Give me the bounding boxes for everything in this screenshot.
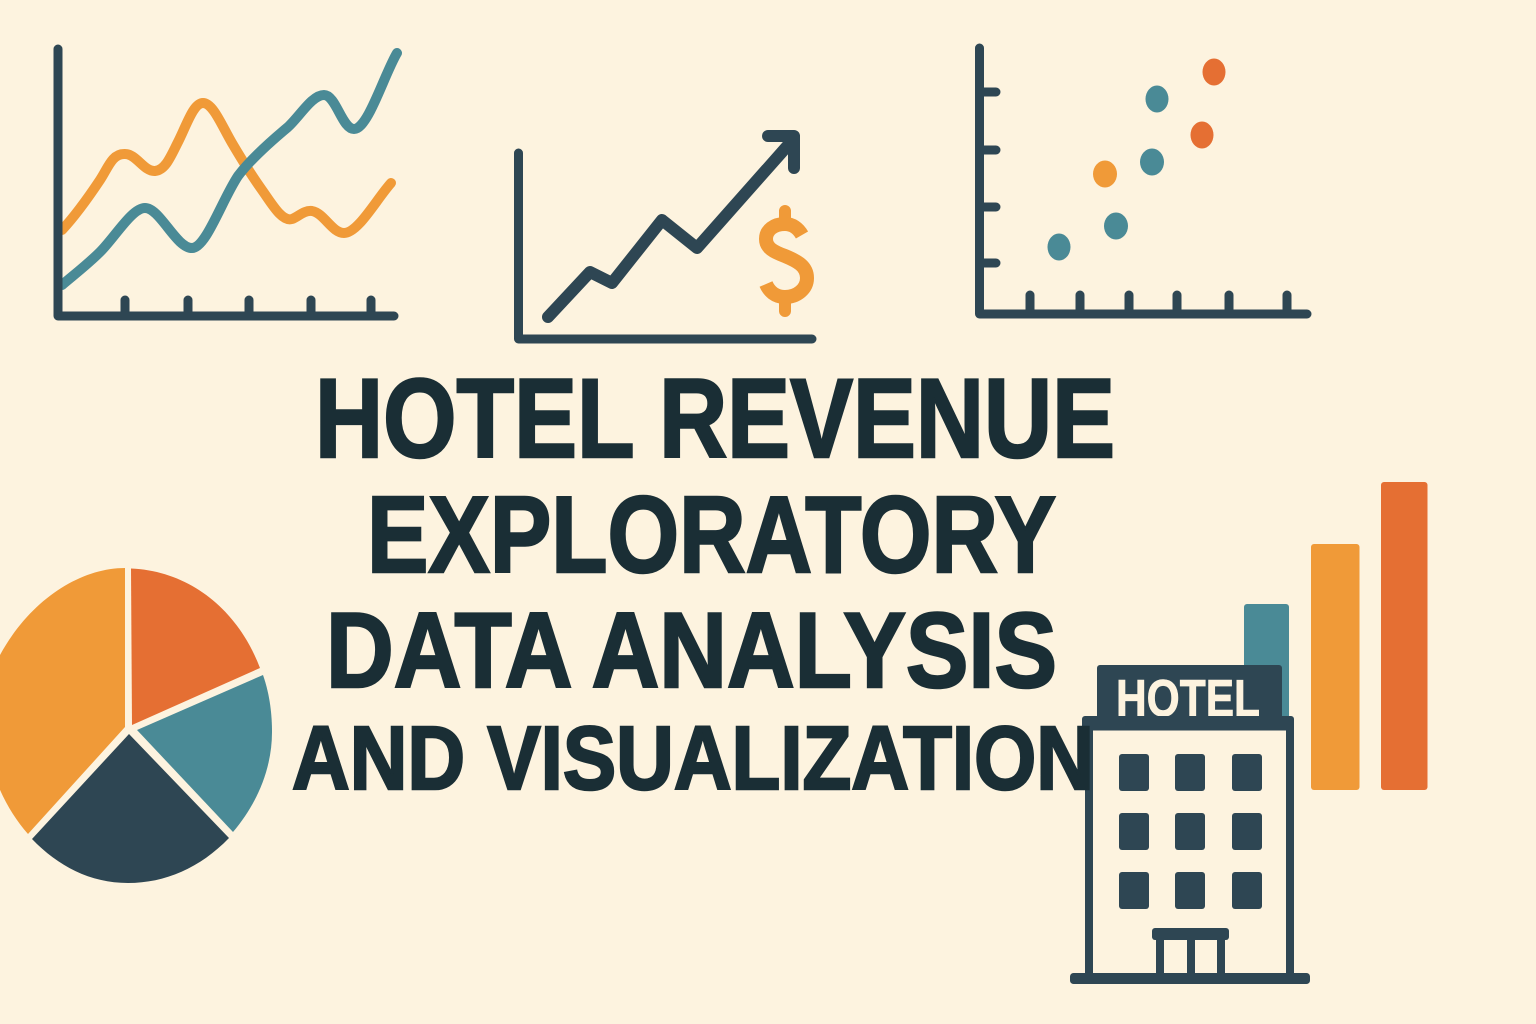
pie slice: red (131, 568, 260, 725)
hotel sign text: HOTEL (1116, 670, 1260, 728)
bar: orange (1311, 544, 1360, 790)
icon: dollar sign (766, 211, 807, 311)
icon: hotel building (1070, 665, 1310, 984)
hotel roof band (1082, 716, 1294, 730)
line chart teal series (62, 53, 397, 285)
title line 2: EXPLORATORY (367, 474, 1056, 596)
bar: teal (1244, 604, 1289, 724)
title line 1: HOTEL REVENUE (315, 356, 1115, 481)
line chart: two trend lines (58, 49, 397, 316)
pie chart (0, 568, 272, 883)
revenue growth chart (518, 136, 812, 339)
scatter plot (980, 48, 1307, 314)
pie slice: dark (32, 734, 229, 883)
hotel walls (1089, 726, 1290, 976)
growth chart axes (518, 153, 812, 339)
title (292, 356, 1115, 809)
hotel windows (1119, 754, 1262, 909)
bar: red (1381, 482, 1428, 790)
scatter plot axes and ticks (980, 48, 1307, 314)
hotel entrance (1152, 928, 1229, 976)
hotel base (1070, 973, 1310, 984)
title line 3: DATA ANALYSIS (326, 590, 1057, 710)
line chart axes and ticks (58, 49, 394, 316)
icon: rising arrow (548, 136, 794, 317)
scatter plot points (1048, 58, 1226, 260)
hotel sign board (1097, 665, 1282, 725)
title line 4: AND VISUALIZATION (292, 709, 1094, 809)
bar chart (1244, 482, 1428, 790)
line chart orange series (62, 103, 391, 233)
pie slice: orange (0, 568, 125, 834)
pie slice: teal (137, 675, 272, 832)
